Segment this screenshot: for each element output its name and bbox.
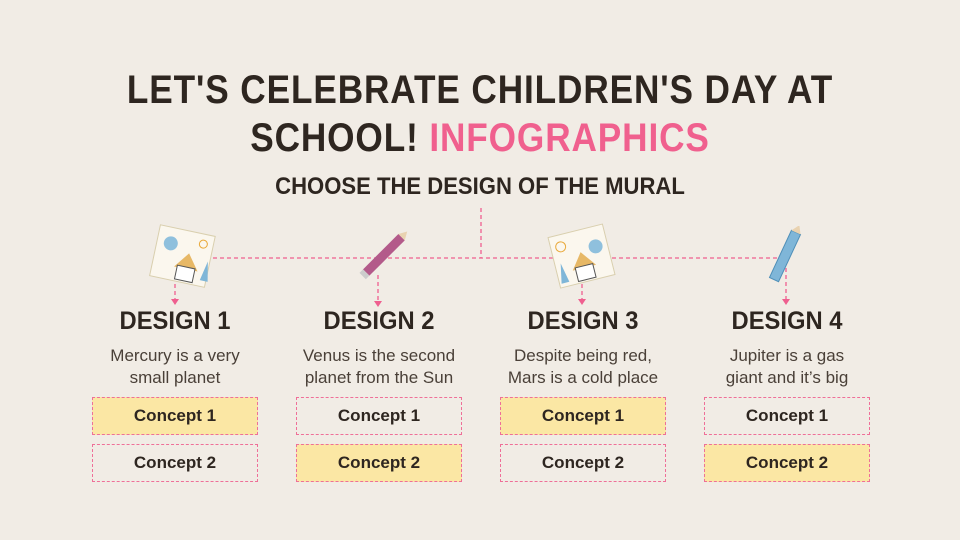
title: [127, 68, 833, 160]
title: LET'S CELEBRATE CHILDREN'S DAY AT: [127, 68, 833, 112]
description 3: Mars is a cold place: [508, 368, 658, 387]
description 4: giant and it’s big: [726, 368, 848, 387]
concept 1: [92, 397, 258, 435]
description 4: [726, 346, 848, 387]
concept 2: Concept 2: [134, 453, 216, 472]
subtitle: CHOOSE THE DESIGN OF THE MURAL: [275, 173, 685, 200]
concept 1: [704, 397, 870, 435]
description 1: Mercury is a very: [110, 346, 240, 365]
column 1: [92, 307, 258, 482]
column 4: [704, 307, 870, 482]
concept 2: [92, 444, 258, 482]
concept 2: [296, 444, 462, 482]
column 3: [500, 307, 666, 482]
heading: design 2: DESIGN 2: [324, 307, 434, 335]
title: SCHOOL! INFOGRAPHICS: [250, 116, 710, 160]
description 3: Despite being red,: [514, 346, 652, 365]
concept 1: Concept 1: [542, 406, 624, 425]
concept 1: [296, 397, 462, 435]
column 2: [296, 307, 462, 482]
heading: design 4: DESIGN 4: [732, 307, 842, 335]
icon: pencil 1: [360, 232, 408, 280]
concept 2: Concept 2: [338, 453, 420, 472]
description 2: [303, 346, 455, 387]
description 3: [508, 346, 658, 387]
description 2: planet from the Sun: [305, 368, 453, 387]
concept 2: [500, 444, 666, 482]
description 1: [110, 346, 240, 387]
description 4: Jupiter is a gas: [730, 346, 844, 365]
concept 1: [500, 397, 666, 435]
icon: drawing 2: [548, 224, 616, 288]
concept 2: Concept 2: [746, 453, 828, 472]
concept 1: Concept 1: [746, 406, 828, 425]
heading: design 1: DESIGN 1: [120, 307, 230, 335]
description 2: Venus is the second: [303, 346, 455, 365]
concept 1: Concept 1: [134, 406, 216, 425]
icon: pencil 2: [768, 226, 802, 282]
concept 2: [704, 444, 870, 482]
description 1: small planet: [130, 368, 220, 387]
concept 2: Concept 2: [542, 453, 624, 472]
concept 1: Concept 1: [338, 406, 420, 425]
heading: design 3: DESIGN 3: [528, 307, 638, 335]
icon: drawing 1: [149, 224, 216, 288]
